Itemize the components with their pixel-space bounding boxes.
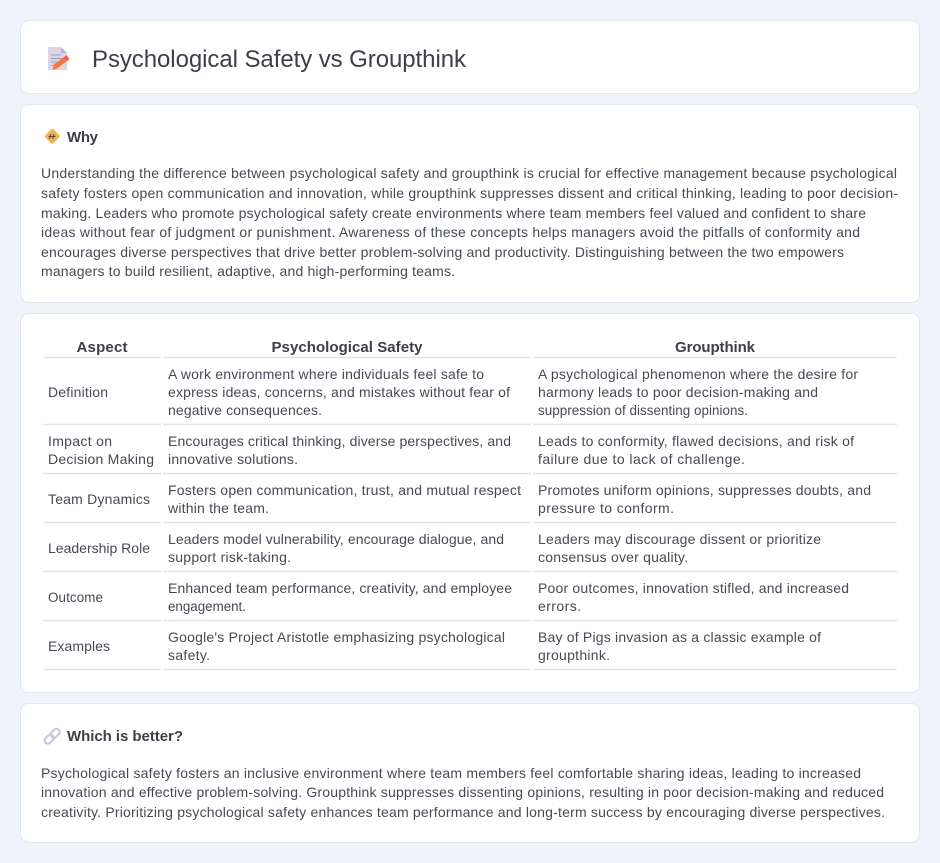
- table row: examples: groupthink.: [538, 647, 610, 663]
- table row: definition: harmony leads to poor decision-making and: [538, 384, 818, 400]
- icon: diamond warning sign: [44, 128, 60, 144]
- table row: leadership role: consensus over quality.: [538, 549, 688, 565]
- table row: team dynamics: [48, 482, 871, 516]
- table row: examples: [48, 629, 821, 663]
- table row: definition: A psychological phenomenon where the desire for: [538, 366, 858, 382]
- text block: why explanation: making. Leaders who promote psychological safety create environments where team members feel valued and confident to share: [41, 205, 866, 221]
- text block: why explanation: safety fosters open communication and innovation, while groupthink suppresses dissent and critical thinking, leading to poor decision-: [41, 185, 898, 201]
- table row: examples: Google's Project Aristotle emphasizing psychological: [168, 629, 505, 645]
- heading: which is better: Which is better?: [67, 728, 183, 745]
- table row: team dynamics: Fosters open communication, trust, and mutual respect: [168, 482, 521, 498]
- table row: examples: safety.: [168, 647, 210, 663]
- table row: leadership role: support risk-taking.: [168, 549, 291, 565]
- title: Psychological Safety vs Groupthink: [92, 46, 467, 73]
- table row: definition: Definition: [48, 384, 108, 400]
- table row: examples: Bay of Pigs invasion as a classic example of: [538, 629, 821, 645]
- text block: why explanation: encourages diverse perspectives that drive better problem-solving and productivity. Distinguishing between the two empowers: [41, 244, 844, 260]
- panel: title header: [20, 20, 920, 94]
- text block: why explanation: ideas without fear of judgment or punishment. Awareness of these concepts helps managers avoid the pitfalls of conformity and: [41, 224, 860, 240]
- table row: team dynamics: Promotes uniform opinions, suppresses doubts, and: [538, 482, 871, 498]
- table row: definition: [48, 366, 858, 418]
- panel: comparison table: [20, 314, 920, 692]
- table row: impact on decision making: innovative solutions.: [168, 451, 298, 467]
- icon: chain link: [43, 727, 61, 745]
- table header: [76, 339, 756, 356]
- panel: why: [20, 104, 920, 302]
- table row: outcome: engagement.: [168, 599, 246, 614]
- table row: impact on decision making: Leads to conformity, flawed decisions, and risk of: [538, 433, 854, 449]
- text block: why explanation: managers to build resilient, adaptive, and high-performing teams.: [41, 263, 455, 279]
- text block: verdict: innovation and effective problem-solving. Groupthink suppresses dissenting opinions, resulting in poor decision-making and reduced: [41, 784, 884, 800]
- table row: leadership role: Leaders model vulnerability, encourage dialogue, and: [168, 531, 504, 547]
- table row: team dynamics: pressure to conform.: [538, 500, 674, 516]
- table header: Groupthink: [675, 339, 756, 356]
- table row: definition: A work environment where individuals feel safe to: [168, 366, 484, 382]
- table row: impact on decision making: failure due to lack of challenge.: [538, 451, 745, 467]
- panel: which is better: [20, 704, 920, 842]
- table row: leadership role: Leadership Role: [48, 540, 150, 556]
- text block: why explanation: [41, 165, 898, 279]
- text block: why explanation: Understanding the difference between psychological safety and groupthink is crucial for effective management because psychological: [41, 165, 897, 181]
- table row: leadership role: [48, 531, 821, 565]
- table header: Psychological Safety: [272, 339, 423, 356]
- table row: outcome: Outcome: [48, 590, 103, 605]
- table row: impact on decision making: Encourages critical thinking, diverse perspectives, and: [168, 433, 511, 449]
- table row: leadership role: Leaders may discourage dissent or prioritize: [538, 531, 821, 547]
- table row: outcome: [48, 580, 849, 614]
- table row: team dynamics: Team Dynamics: [48, 491, 150, 507]
- table row: definition: negative consequences.: [168, 402, 322, 418]
- table header: Aspect: [76, 339, 128, 356]
- table row: team dynamics: within the team.: [167, 500, 269, 516]
- icon: document with pencil: [48, 47, 70, 70]
- table row: outcome: errors.: [538, 598, 581, 614]
- text block: verdict: Psychological safety fosters an inclusive environment where team members feel comfortable sharing ideas, leading to increased: [41, 765, 861, 781]
- heading: why: Why: [67, 129, 99, 146]
- table row: impact on decision making: Impact on: [48, 433, 112, 449]
- table row: definition: suppression of dissenting opinions.: [538, 403, 748, 418]
- table row: impact on decision making: Decision Making: [48, 451, 154, 467]
- table row: examples: Examples: [48, 638, 110, 654]
- table row: impact on decision making: [48, 433, 854, 467]
- table row: outcome: Enhanced team performance, creativity, and employee: [168, 580, 512, 596]
- table row: outcome: Poor outcomes, innovation stifled, and increased: [538, 580, 849, 596]
- table row: definition: express ideas, concerns, and mistakes without fear of: [168, 384, 510, 400]
- text block: verdict: [41, 765, 885, 820]
- text block: verdict: creativity. Prioritizing psychological safety enhances team performance and long-term success by encouraging diverse perspectives.: [41, 804, 885, 820]
